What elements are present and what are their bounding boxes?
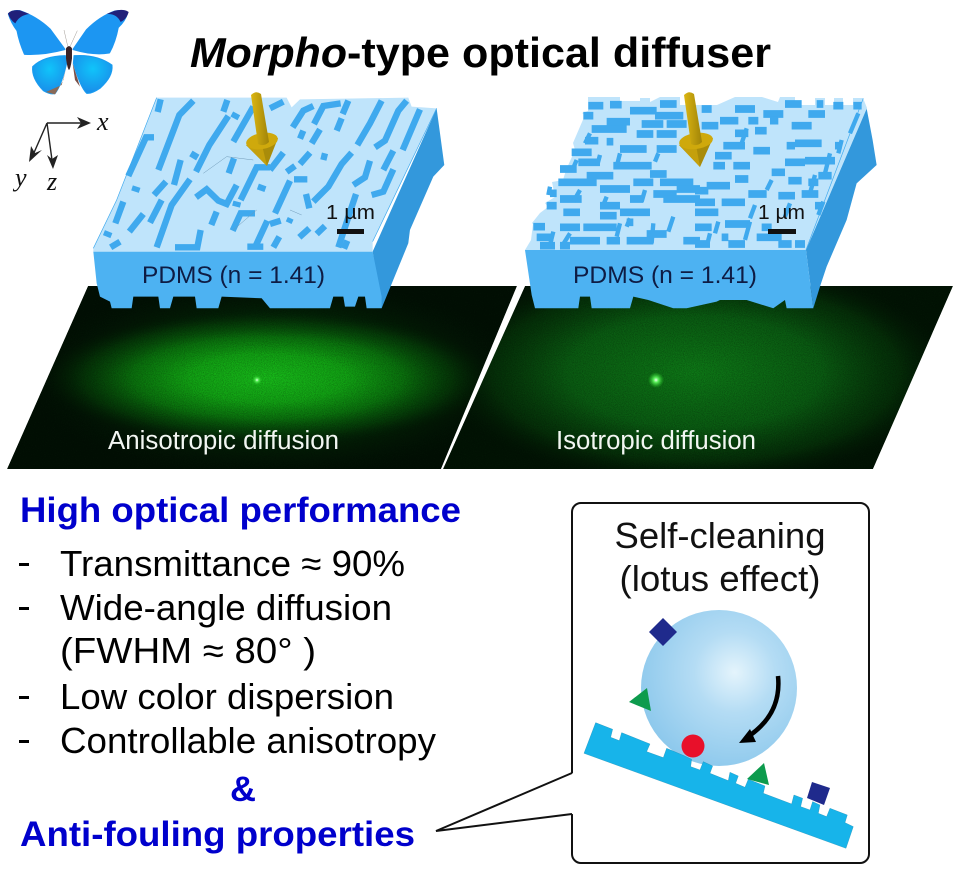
heading: high optical performance: High optical performance xyxy=(20,491,461,530)
walls left half xyxy=(533,104,700,246)
title: -type optical diffuser xyxy=(347,29,771,76)
scale bar: 1 µm xyxy=(758,201,805,224)
heading: self-cleaning: Self-cleaning xyxy=(614,515,826,556)
axes xyz: z xyxy=(46,167,57,196)
panel: anisotropic diffusion screen: Anisotropic diffusion xyxy=(108,427,339,455)
list: performance items xyxy=(19,543,436,761)
subheading: lotus effect: (lotus effect) xyxy=(620,558,820,599)
axes xyz: x xyxy=(96,107,109,136)
grooves right half xyxy=(270,101,420,249)
dirt particle: green triangle on surface xyxy=(747,763,769,785)
list: performance items: Low color dispersion xyxy=(60,676,394,717)
dirt particle: red circle xyxy=(682,734,704,758)
panel: isotropic PDMS structure xyxy=(525,97,877,308)
title: Morpho xyxy=(190,29,347,76)
list: performance items: Transmittance ≈ 90% xyxy=(60,543,405,584)
tilted textured surface xyxy=(584,723,853,848)
arrow: incident light left xyxy=(245,92,279,166)
panel: anisotropic diffusion screen xyxy=(7,286,517,469)
label: PDMS: PDMS (n = 1.41) xyxy=(142,262,325,289)
scale bar xyxy=(758,201,805,234)
dirt particle: green triangle xyxy=(629,688,651,711)
heading: anti-fouling properties: Anti-fouling properties xyxy=(20,815,415,854)
arrow: incident light right xyxy=(678,92,714,167)
panel: anisotropic PDMS structure xyxy=(93,98,444,308)
walls right half xyxy=(695,104,862,244)
label: PDMS: PDMS (n = 1.41) xyxy=(573,262,757,289)
water droplet xyxy=(641,610,797,766)
dirt particle: navy square xyxy=(807,782,830,805)
icon: morpho butterfly xyxy=(8,10,129,94)
panel: isotropic diffusion screen xyxy=(443,286,953,469)
grooves left half xyxy=(107,99,270,247)
dirt particle: navy diamond xyxy=(649,618,677,646)
list: performance items: (FWHM ≈ 80° ) xyxy=(60,630,316,671)
panel: isotropic diffusion screen: Isotropic diffusion xyxy=(556,427,756,455)
axes xyz: y xyxy=(12,163,27,192)
axes xyz xyxy=(12,107,109,196)
ampersand: & xyxy=(230,770,256,809)
list: performance items: Controllable anisotropy xyxy=(60,720,436,761)
callout: self-cleaning box xyxy=(436,503,869,863)
scale bar: 1 µm xyxy=(326,201,375,224)
list: performance items: Wide-angle diffusion xyxy=(60,587,392,628)
rolling arrow xyxy=(739,676,778,743)
scale bar xyxy=(326,201,375,234)
